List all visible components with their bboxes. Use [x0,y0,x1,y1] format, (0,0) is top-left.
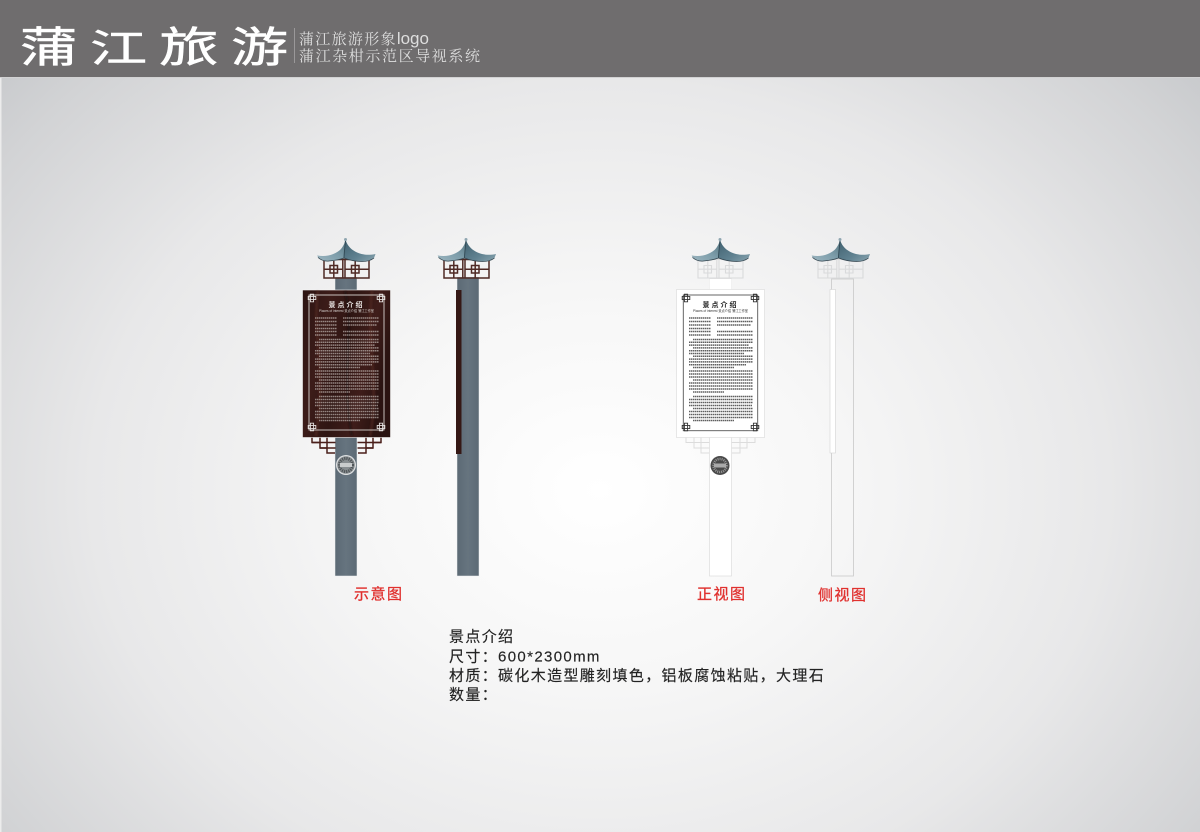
roof lattice [698,259,743,278]
roof lattice [324,259,369,278]
lower fret [686,437,755,453]
panel heading: 景点介绍 [328,300,364,309]
header subtitle: 蒲江旅游形象logo [299,28,429,49]
logo wordmark: 蒲江旅游: 江 [90,28,147,71]
specification text block: 尺寸：600*2300mm [449,648,601,666]
wood grain [316,291,374,436]
panel body text texture [689,318,753,420]
roof [692,238,750,262]
medallion [710,456,730,475]
header subtitle: 蒲江杂柑示范区导视系统 [299,45,482,66]
logo wordmark: 蒲江旅游: 蒲 [20,24,77,71]
corner knots [682,294,759,431]
specification text block [449,628,825,704]
sign: side elevation [812,238,870,576]
header subtitle [299,28,482,66]
lower fret [312,437,381,453]
sign: illustrated front view [302,238,390,576]
roof lattice [818,259,863,278]
specification text block: 景点介绍 [449,628,514,646]
roof [812,238,870,262]
white panel [676,290,764,438]
roof [317,238,376,262]
post cap [710,279,732,290]
corner knots [308,294,385,431]
post [335,277,357,576]
post [832,279,854,576]
post [710,279,732,576]
board edge [830,290,836,453]
panel border [683,295,758,431]
sign: front elevation [676,238,764,576]
panel subheading: Places of interest 景点介绍 蒲江工作室 [319,308,374,313]
sign: illustrated side view [438,238,496,576]
board edge [456,290,462,454]
panel border [309,295,384,430]
roof [438,238,496,262]
label: 侧视图: 侧视图 [818,587,868,604]
roof lattice [444,259,489,278]
panel subheading: Places of interest 景点介绍 蒲江工作室 [693,308,748,313]
logo wordmark: 蒲江旅游: 游 [231,24,288,71]
logo divider [294,28,295,63]
medallion [336,455,356,475]
logo wordmark: 蒲江旅游: 旅 [159,24,219,71]
specification text block: 材质：碳化木造型雕刻填色，铝板腐蚀粘贴，大理石 [449,666,825,684]
label: 示意图: 示意图 [354,585,404,603]
panel body text texture [315,318,379,420]
wood panel [302,290,390,438]
label: 正视图: 正视图 [697,586,747,603]
logo wordmark: 蒲江旅游 [20,24,288,71]
specification text block: 数量： [449,686,498,704]
panel heading: 景点介绍 [702,300,738,309]
post [457,277,479,576]
